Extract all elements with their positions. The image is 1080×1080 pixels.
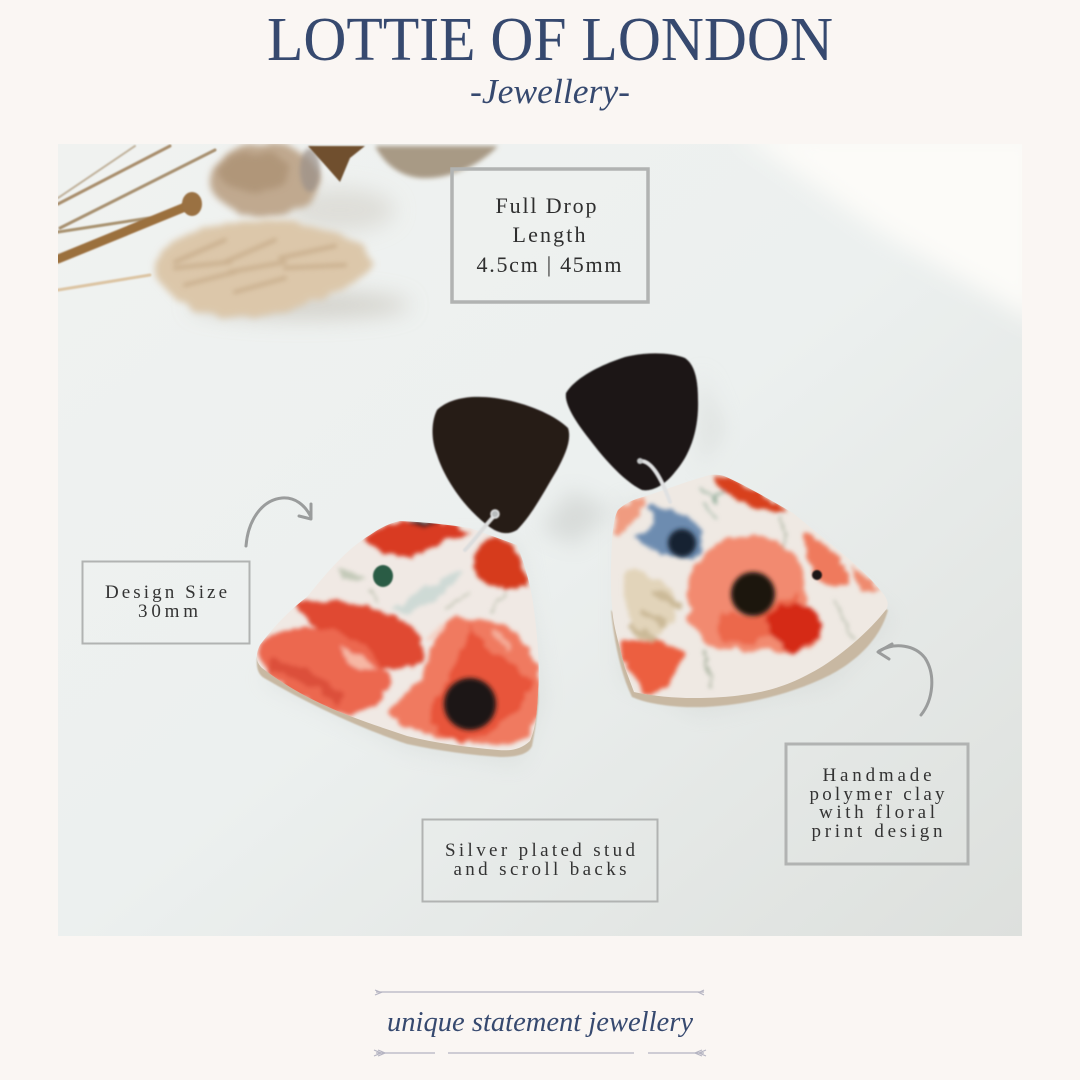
footer divider top [375, 990, 704, 995]
left dangle edge [256, 657, 540, 758]
callout: handmade polymer clay [786, 744, 968, 864]
subtitle: -Jewellery- [470, 72, 630, 111]
callout: silver plated backs: and scroll backs [454, 859, 626, 880]
callout: handmade polymer clay: print design [812, 821, 943, 842]
callout: full drop length: Length [512, 222, 586, 247]
callout: handmade polymer clay: polymer clay [810, 784, 945, 805]
left hook [465, 510, 499, 550]
right hook [637, 458, 670, 502]
dried flowers [58, 143, 498, 319]
left stud [432, 397, 569, 533]
left poppy centre [444, 678, 496, 730]
small poppy centre [812, 570, 822, 580]
callout: silver plated backs: Silver plated stud [445, 840, 636, 861]
callout: design size: Design Size [105, 582, 227, 603]
left bud [373, 565, 393, 587]
callout: handmade polymer clay: Handmade [822, 765, 932, 786]
footer divider bottom [374, 1050, 706, 1056]
right dangle face [605, 470, 895, 705]
right poppy centre [731, 572, 775, 616]
footer tagline: unique statement jewellery [387, 1006, 693, 1038]
left earring [250, 397, 569, 760]
callout: full drop length [452, 169, 648, 302]
right dangle edge [611, 600, 888, 707]
product photo panel [58, 130, 1040, 936]
earring shadows [260, 540, 545, 765]
callout: full drop length: Full Drop [496, 193, 596, 218]
arrow: to handmade clay [878, 644, 932, 715]
blue flower centre [668, 529, 696, 557]
left dangle face [256, 521, 539, 750]
right earring [566, 353, 895, 707]
callout: silver plated backs [422, 820, 658, 902]
arrow: to design size [246, 498, 311, 546]
callout: full drop length: 4.5cm | 45mm [476, 252, 622, 277]
callout: handmade polymer clay: with floral [819, 802, 935, 823]
title: LOTTIE OF LONDON [267, 6, 833, 74]
photo highlight wedge [764, 144, 1022, 314]
right stud [566, 353, 698, 490]
callout: design size: 30mm [138, 601, 198, 622]
callout: design size [82, 562, 250, 644]
